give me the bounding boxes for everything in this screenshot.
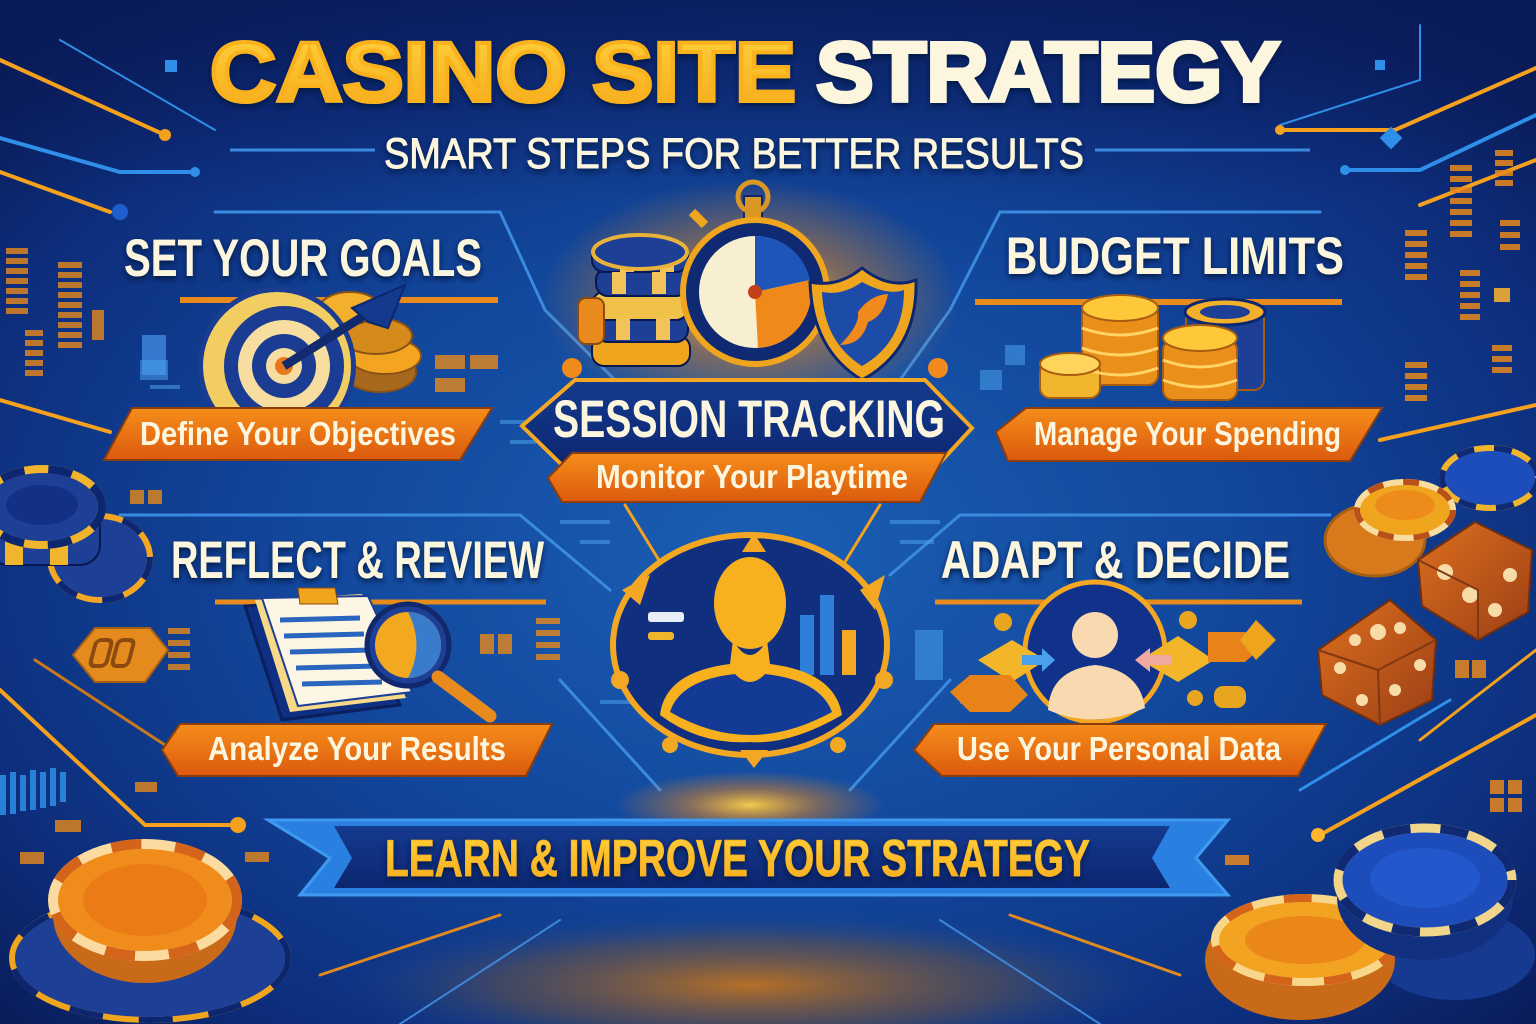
heading: budget limits: BUDGET LIMITS — [1006, 227, 1344, 286]
panel: adapt and decide — [914, 531, 1326, 776]
ribbon: use your personal data: Use Your Personal Data — [957, 730, 1282, 767]
title: CASINO SITE — [210, 25, 796, 119]
city bars left — [6, 248, 560, 864]
ribbon: analyze your results — [162, 724, 552, 776]
icon: central player badge — [611, 533, 893, 768]
icon: small chip — [73, 628, 168, 682]
chips: upper right — [1325, 448, 1536, 576]
ribbon: monitor your playtime — [548, 453, 946, 502]
data dots center — [140, 345, 1025, 704]
ribbon: define your objectives: Define Your Objectives — [140, 415, 456, 452]
heading: set your goals: SET YOUR GOALS — [124, 229, 482, 288]
chips: left stack — [0, 469, 150, 600]
icon: coin stacks — [1040, 295, 1265, 400]
glow behind icons — [540, 180, 960, 420]
icon: clipboard with magnifier — [245, 588, 490, 720]
icon: die upper — [1418, 522, 1532, 640]
banner: session tracking: SESSION TRACKING — [553, 390, 945, 449]
ribbon: use your personal data — [914, 724, 1326, 776]
icon: chip stack — [578, 235, 690, 366]
ribbon: monitor your playtime: Monitor Your Playtime — [596, 458, 908, 495]
panel: reflect and review — [73, 531, 552, 776]
ribbon: define your objectives — [104, 408, 492, 460]
icon: stopwatch — [683, 182, 827, 364]
banner: session tracking — [522, 380, 972, 468]
glow: banner — [615, 771, 885, 839]
icon: shield — [810, 268, 916, 380]
icon: person with decision arrows — [950, 582, 1276, 722]
heading: adapt and decide: ADAPT & DECIDE — [941, 531, 1290, 590]
panel: set your goals — [104, 229, 498, 460]
banner: learn and improve — [268, 820, 1228, 895]
ribbon: manage your spending: Manage Your Spending — [1034, 415, 1341, 452]
panel: session tracking — [522, 180, 972, 502]
heading: reflect and review: REFLECT & REVIEW — [171, 531, 544, 590]
chips: lower right — [1205, 828, 1535, 1020]
subtitle: SMART STEPS FOR BETTER RESULTS — [384, 130, 1084, 178]
ribbon: analyze your results: Analyze Your Results — [208, 730, 506, 767]
title — [210, 25, 1280, 119]
banner: learn and improve: LEARN & IMPROVE YOUR STRATEGY — [385, 830, 1090, 888]
ribbon: manage your spending — [996, 408, 1382, 461]
panel: budget limits — [975, 227, 1382, 461]
icon: target with dart — [198, 285, 421, 445]
chips: lower left — [12, 844, 288, 1020]
blue bars lower left — [0, 768, 66, 815]
icon: die lower — [1318, 600, 1436, 725]
city bars right — [1225, 150, 1522, 865]
circuit nodes — [112, 60, 1402, 842]
title: STRATEGY — [816, 25, 1280, 119]
